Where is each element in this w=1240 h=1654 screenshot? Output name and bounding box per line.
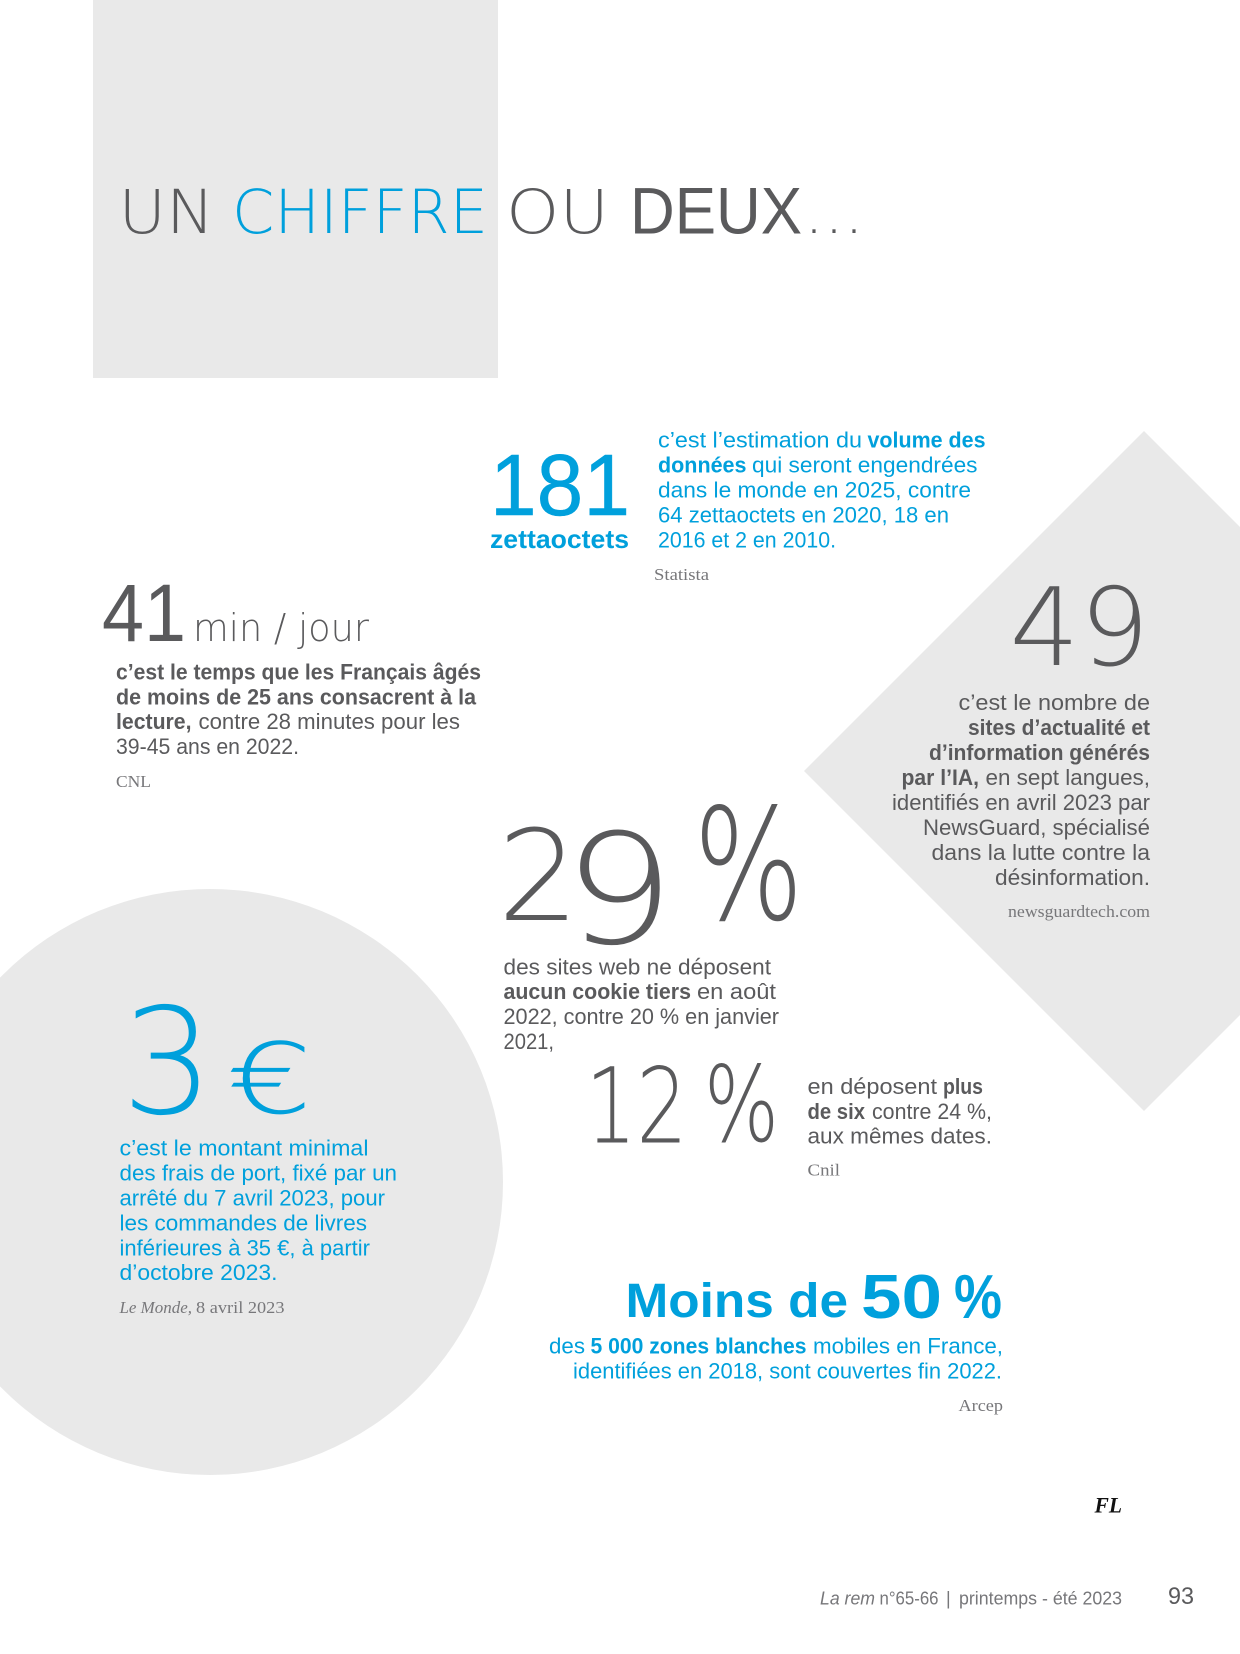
footer: issue line: | <box>946 1588 951 1608</box>
description: arrêté du 7 avril 2023, pour <box>120 1186 385 1210</box>
stat: 29 % <box>498 775 804 1054</box>
figure: 12 %: % <box>704 1044 779 1166</box>
description: contre 24 %, <box>872 1099 992 1124</box>
footer: page number: 93 <box>1168 1583 1194 1610</box>
description: lecture, <box>116 709 192 734</box>
figure: 12 % <box>586 1044 779 1168</box>
background: grey rectangle <box>93 0 498 378</box>
description: NewsGuard, spécialisé <box>923 815 1150 840</box>
description: 5 000 zones blanches <box>590 1334 806 1358</box>
stat: 12 % <box>586 1044 992 1180</box>
description <box>892 690 1151 890</box>
description: de six <box>808 1099 866 1124</box>
description <box>658 428 986 552</box>
figure: 29 %: 2 <box>498 803 580 950</box>
description: 2016 et 2 en 2010. <box>658 528 836 552</box>
description: d’octobre 2023. <box>120 1260 278 1285</box>
description: des <box>549 1334 585 1358</box>
description: en sept langues, <box>986 765 1150 790</box>
stat: 181 zettaoctets <box>490 428 986 584</box>
title: OU <box>506 177 609 248</box>
figure: 12 %: 12 <box>586 1046 688 1168</box>
description: identifiés en avril 2023 par <box>892 790 1150 815</box>
footer <box>820 1583 1194 1610</box>
title: ... <box>804 177 864 248</box>
description: volume des <box>868 428 986 452</box>
description <box>504 954 779 1054</box>
background: grey diamond <box>804 431 1240 1111</box>
source: CNL: CNL <box>116 772 151 791</box>
description: c’est l’estimation du <box>658 428 862 452</box>
title <box>118 174 864 248</box>
title: CHIFFRE <box>232 177 488 248</box>
description: contre 28 minutes pour les <box>198 709 460 734</box>
figure: Moins de 50 % <box>626 1263 1002 1332</box>
footer: issue line: n°65-66 <box>880 1588 938 1608</box>
source: Arcep: Arcep <box>958 1396 1003 1415</box>
description: des sites web ne déposent <box>504 954 771 980</box>
stat: moins de 50 % <box>549 1263 1003 1415</box>
description: identifiées en 2018, sont couvertes fin 2022. <box>573 1358 1002 1384</box>
figure: 41: 41 <box>102 568 186 659</box>
description <box>808 1074 992 1148</box>
description: plus <box>943 1074 983 1099</box>
description: en août <box>697 979 776 1004</box>
description: c’est le montant minimal <box>120 1136 368 1160</box>
figure: 181: 181 <box>490 437 630 534</box>
figure: 3 €: 3 <box>122 977 214 1148</box>
figure: 49: 49 <box>1010 566 1150 691</box>
figure: Moins de 50 %: 50 <box>861 1263 942 1332</box>
figure: 29 % <box>498 775 804 980</box>
figure: 3 € <box>122 977 313 1148</box>
description: par l’IA, <box>902 765 979 790</box>
description: en déposent <box>808 1074 937 1099</box>
source: Cnil: Cnil <box>808 1160 840 1180</box>
description: inférieures à 35 €, à partir <box>120 1236 370 1260</box>
figure: 29 %: % <box>694 775 804 956</box>
description: aucun cookie tiers <box>504 979 691 1004</box>
footer: issue line <box>820 1588 1122 1608</box>
description: désinformation. <box>995 865 1150 890</box>
description <box>120 1136 397 1285</box>
description: qui seront engendrées <box>752 452 978 478</box>
description: 64 zettaoctets en 2020, 18 en <box>658 502 949 528</box>
unit: zettaoctets: zettaoctets <box>490 524 629 554</box>
description: d’information générés <box>929 740 1150 765</box>
description: c’est le temps que les Français âgés <box>116 660 481 684</box>
title: DEUX <box>630 174 802 248</box>
figure: Moins de 50 %: Moins de <box>626 1275 848 1328</box>
description <box>549 1334 1003 1384</box>
footer: issue line: La rem <box>820 1588 875 1608</box>
stat: 41 min / jour <box>102 568 481 791</box>
source: newsguardtech.com: newsguardtech.com <box>1008 902 1150 921</box>
background: grey circle <box>0 889 503 1475</box>
description: aux mêmes dates. <box>808 1124 992 1148</box>
description: 2022, contre 20 % en janvier <box>504 1004 779 1029</box>
source: Le Monde: Le Monde, <box>119 1298 192 1317</box>
source: Le Monde: 8 avril 2023 <box>196 1298 284 1317</box>
description: données <box>658 452 746 478</box>
unit: min / jour: min / jour <box>193 606 369 650</box>
description: des frais de port, fixé par un <box>120 1160 397 1186</box>
title: UN <box>118 177 214 248</box>
description: les commandes de livres <box>120 1210 367 1236</box>
source: Statista: Statista <box>654 565 709 584</box>
source: Le Monde <box>119 1298 284 1317</box>
stat: 3 € <box>119 977 397 1317</box>
figure: Moins de 50 %: % <box>954 1263 1002 1332</box>
figure: 29 %: 9 <box>563 802 675 980</box>
figure: 3 €: € <box>227 1023 313 1137</box>
description: sites d’actualité et <box>968 715 1151 740</box>
description: 2021, <box>504 1029 554 1054</box>
description: c’est le nombre de <box>958 690 1150 715</box>
description: dans le monde en 2025, contre <box>658 478 971 502</box>
description: de moins de 25 ans consacrent à la <box>116 684 477 710</box>
description <box>116 660 481 759</box>
description: 39-45 ans en 2022. <box>116 734 299 759</box>
description: dans la lutte contre la <box>932 840 1151 865</box>
description: mobiles en France, <box>813 1334 1003 1358</box>
author initials: FL: FL <box>1094 1492 1122 1518</box>
stat: 49 <box>892 566 1151 921</box>
footer: issue line: printemps - été 2023 <box>959 1588 1122 1608</box>
